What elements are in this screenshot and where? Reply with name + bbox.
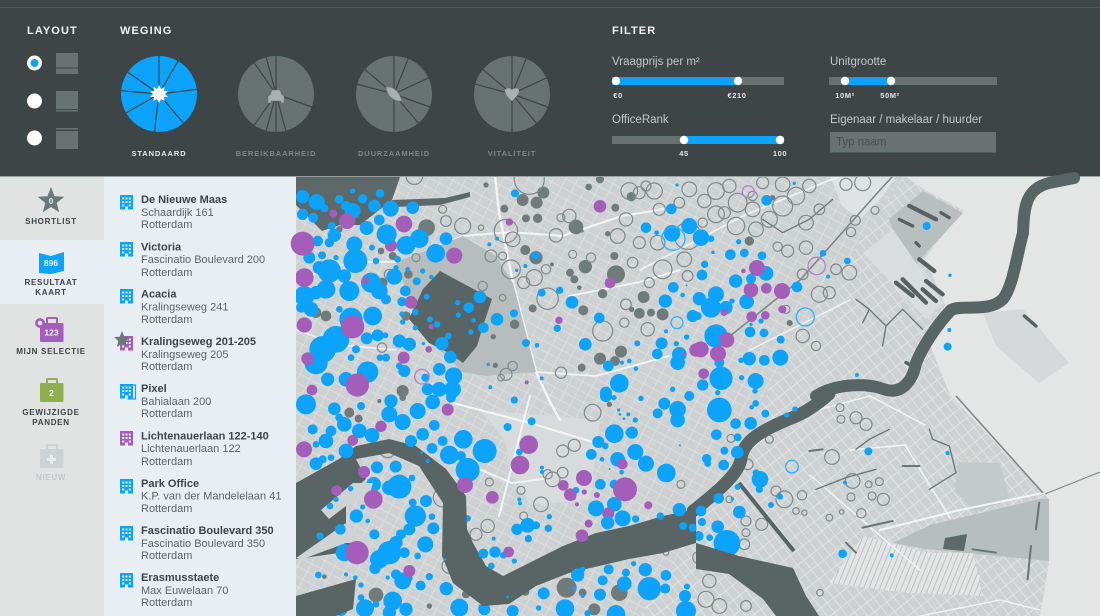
nav item: gewijzigde panden: PANDEN [32, 418, 70, 427]
nav item: resultaat kaart: RESULTAAT [25, 278, 77, 287]
map: harbour pier north [321, 483, 373, 519]
result: Victoria: Victoria [141, 242, 182, 254]
icon: car [268, 90, 284, 103]
result: Park Office: Park Office [141, 478, 199, 490]
result: Victoria: Fascinatio Boulevard 200 [141, 254, 265, 266]
nav item: shortlist [25, 187, 77, 226]
result: Kralingseweg 201-205 [114, 331, 256, 373]
result: De Nieuwe Maas: Rotterdam [141, 219, 192, 231]
map: light plaza blocks [480, 410, 600, 505]
result: Erasmusstaete: Max Euwelaan 70 [141, 585, 228, 597]
nav item: mijn selectie: MIJN SELECTIE [16, 347, 86, 356]
nav item: resultaat kaart: KAART [35, 288, 67, 297]
heading: weging: WEGING [120, 25, 172, 37]
nav item: gewijzigde panden: GEWIJZIGDE [22, 408, 80, 417]
nav item: shortlist: SHORTLIST [25, 217, 77, 226]
map: lower harbour [296, 579, 356, 616]
pie: bereikbaarheid [236, 56, 316, 158]
map: dark polder marks [809, 429, 1039, 579]
pie: standaard: STANDAARD [131, 149, 187, 158]
map: white roads [296, 176, 1043, 616]
result: Lichtenauerlaan 122-140: Rotterdam [141, 456, 192, 468]
map: north-west dark patch [296, 177, 400, 231]
result: Lichtenauerlaan 122-140 [120, 430, 269, 468]
result: Fascinatio Boulevard 350: Rotterdam [141, 550, 192, 562]
map: city land area [296, 176, 1049, 616]
result: Park Office: Rotterdam [141, 503, 192, 515]
slider: officerank: OfficeRank [612, 114, 669, 126]
layout option 3 [27, 128, 78, 149]
result: Kralingseweg 201-205: Rotterdam [141, 361, 192, 373]
result: Victoria [120, 242, 265, 279]
result: Acacia: Kralingseweg 241 [141, 302, 228, 314]
slider: officerank: 100 [773, 149, 787, 158]
heading: filter: FILTER [612, 25, 656, 37]
layout option 1 [27, 53, 78, 74]
map: light northern district [830, 176, 896, 220]
map: eastern green fields [893, 499, 1049, 561]
map: grey inactive filled circles [311, 175, 793, 615]
pie: standaard [121, 56, 197, 158]
slider: unitgrootte: 10M² [835, 91, 855, 100]
nav item: resultaat kaart: 896 [44, 258, 58, 268]
map: street block texture west [296, 176, 905, 616]
heading: layout: LAYOUT [27, 25, 78, 37]
nav item: gewijzigde panden [22, 379, 80, 427]
result: Park Office [120, 478, 281, 515]
map: striped harbour fields [863, 229, 943, 319]
nav item: gewijzigde panden: 2 [49, 388, 54, 398]
nav item: mijn selectie [16, 318, 86, 356]
result: De Nieuwe Maas: Schaardijk 161 [141, 207, 214, 219]
map: blue outline rings [662, 227, 814, 473]
map: harbour basins [296, 459, 366, 559]
result: Park Office: K.P. van der Mandelelaan 41 [141, 490, 281, 502]
map: light park south-east [955, 462, 1010, 512]
map background: outer polder [296, 176, 1100, 616]
result: Erasmusstaete: Rotterdam [141, 597, 192, 609]
panel: top control bar [0, 0, 1100, 177]
nav item: shortlist: 0 [49, 197, 54, 206]
map: dark diagonal rail line [725, 176, 1100, 494]
map: lake [409, 271, 492, 363]
icon: heart [505, 88, 519, 101]
pie: vitaliteit [474, 56, 550, 158]
pie: bereikbaarheid: BEREIKBAARHEID [236, 149, 316, 158]
active nav tab background [0, 240, 104, 304]
nav item: mijn selectie: 123 [44, 328, 59, 338]
result: Acacia [120, 288, 228, 326]
result: Pixel [120, 383, 211, 420]
result: Victoria: Rotterdam [141, 267, 192, 279]
slider: unitgrootte: Unitgrootte [830, 56, 886, 68]
slider: vraagprijs per m2: Vraagprijs per m² [612, 56, 700, 68]
pie: vitaliteit: VITALITEIT [488, 149, 536, 158]
slider: vraagprijs per m2 [612, 56, 784, 100]
map: outlying neighbourhood [983, 309, 1069, 383]
map: canal [739, 483, 794, 551]
slider: officerank: 45 [679, 149, 689, 158]
result: Pixel: Bahialaan 200 [141, 396, 211, 408]
map: upstream river west section [693, 394, 829, 511]
result: Kralingseweg 201-205: Kralingseweg 201-205 [141, 336, 256, 348]
slider: vraagprijs per m2: €210 [727, 91, 747, 100]
map: eastern grey district [889, 191, 963, 273]
map: harbour pier south [296, 523, 369, 559]
icon: leaf [386, 87, 402, 101]
map: purple outline rings [415, 186, 825, 384]
map: park around lake [396, 236, 536, 376]
result: Erasmusstaete [120, 572, 228, 609]
map: blue circles over water [296, 188, 798, 598]
result: Lichtenauerlaan 122-140: Lichtenauerlaan 122 [141, 443, 241, 455]
nav item: resultaat kaart [25, 252, 77, 297]
nav item: nieuw [36, 445, 66, 482]
map: street block texture east [640, 176, 1049, 616]
result: De Nieuwe Maas: De Nieuwe Maas [141, 194, 227, 206]
field: eigenaar makelaar huurder [830, 114, 996, 152]
result: Pixel: Rotterdam [141, 408, 192, 420]
result: Acacia: Rotterdam [141, 314, 192, 326]
slider: unitgrootte: 50M² [880, 91, 900, 100]
field: eigenaar makelaar huurder: Eigenaar / makelaar / huurder [830, 114, 982, 126]
panel: left navigation column [0, 176, 104, 616]
map: grey outline rings [311, 164, 889, 613]
map: striped polder fields [829, 536, 983, 596]
field: eigenaar makelaar huurder: Typ naam [836, 136, 886, 148]
result: Fascinatio Boulevard 350: Fascinatio Boulevard 350 [141, 525, 274, 537]
result list [114, 194, 281, 609]
panel: result list background [104, 176, 296, 616]
map: blue result circles [294, 182, 952, 616]
map: polder stripes [829, 536, 983, 596]
map: thin canals [763, 199, 923, 346]
map: north canal [392, 192, 470, 207]
result: Pixel: Pixel [141, 383, 167, 395]
map: purple selected circles [295, 200, 790, 577]
result: Lichtenauerlaan 122-140: Lichtenauerlaan 122-140 [141, 430, 269, 442]
map: purple circles over water [291, 210, 588, 564]
slider: officerank [612, 114, 787, 158]
map: south river branch [696, 543, 819, 616]
result: Kralingseweg 201-205: Kralingseweg 205 [141, 349, 228, 361]
result: Erasmusstaete: Erasmusstaete [141, 572, 219, 584]
pie: duurzaamheid [356, 56, 432, 158]
slider: vraagprijs per m2: €0 [613, 91, 623, 100]
slider: unitgrootte [829, 56, 997, 100]
layout option 2 [27, 91, 78, 112]
map: dark harbour slips [896, 206, 1036, 366]
map: dark field block [943, 534, 967, 551]
result: Fascinatio Boulevard 350: Fascinatio Boulevard 350 [141, 538, 265, 550]
result: De Nieuwe Maas [120, 194, 227, 231]
map: river Nieuwe Maas [339, 439, 696, 606]
map: upstream river east section [816, 178, 1074, 396]
result: Acacia: Acacia [141, 288, 177, 300]
nav item: nieuw: NIEUW [36, 473, 66, 482]
pie: duurzaamheid: DUURZAAMHEID [358, 149, 430, 158]
result: Fascinatio Boulevard 350 [120, 525, 274, 562]
